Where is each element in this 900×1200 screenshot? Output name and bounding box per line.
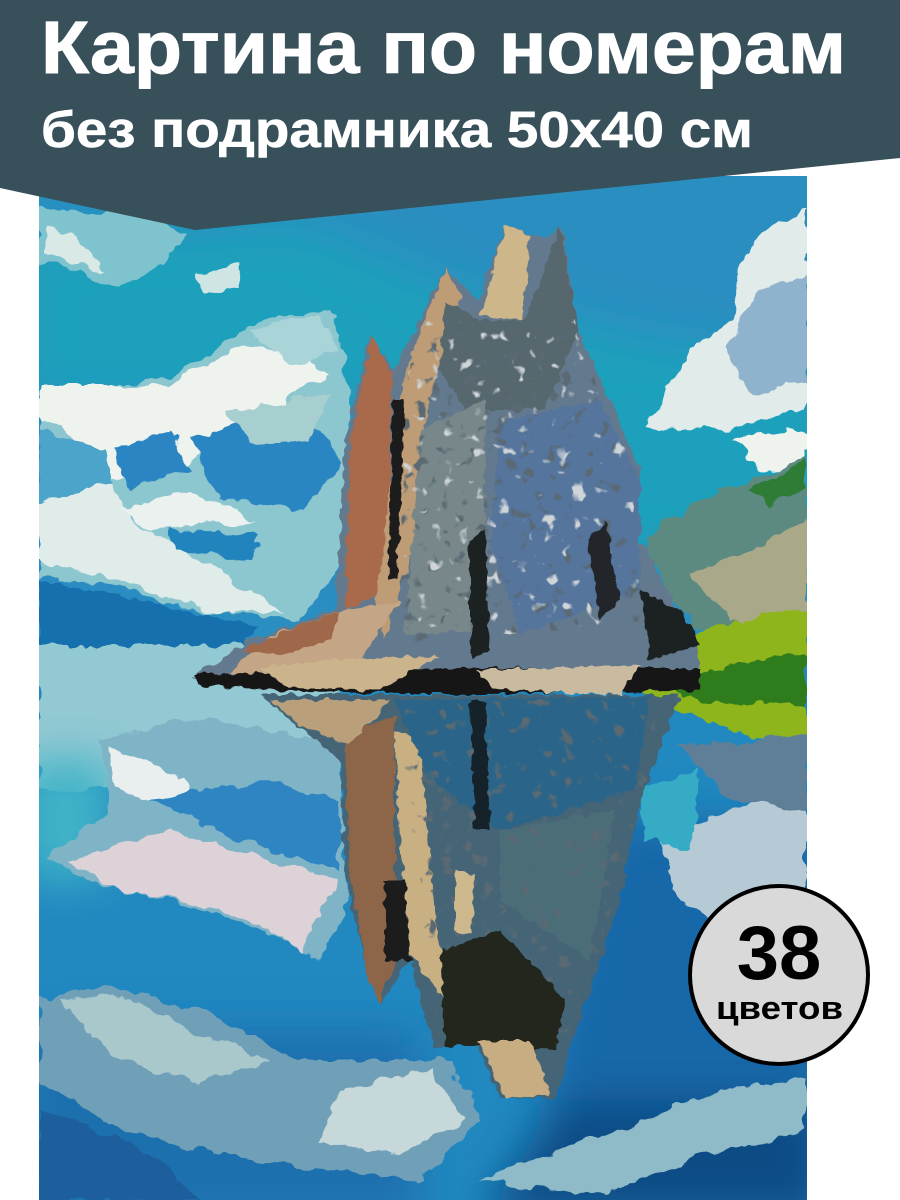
sky background <box>20 176 830 656</box>
cloud reflections <box>39 720 807 1200</box>
reflection brush speckle <box>400 700 660 1040</box>
badge: 38 colours <box>690 886 868 1064</box>
green hillside at right <box>648 455 807 640</box>
badge number: 38 <box>737 911 821 996</box>
lawn in front of the hillside <box>642 610 807 740</box>
clouds <box>39 205 807 620</box>
rock brush speckle <box>400 320 640 650</box>
header banner <box>0 0 900 230</box>
mountain reflection <box>260 695 680 1098</box>
title: Картина по номерам <box>41 6 846 89</box>
painting: mountain island reflected in a lake <box>20 176 830 1200</box>
distant blue hill <box>39 582 260 650</box>
water background <box>20 645 830 1200</box>
badge label: цветов <box>716 990 843 1026</box>
mountain rock <box>190 225 700 695</box>
subtitle: без подрамника 50х40 см <box>41 101 753 158</box>
